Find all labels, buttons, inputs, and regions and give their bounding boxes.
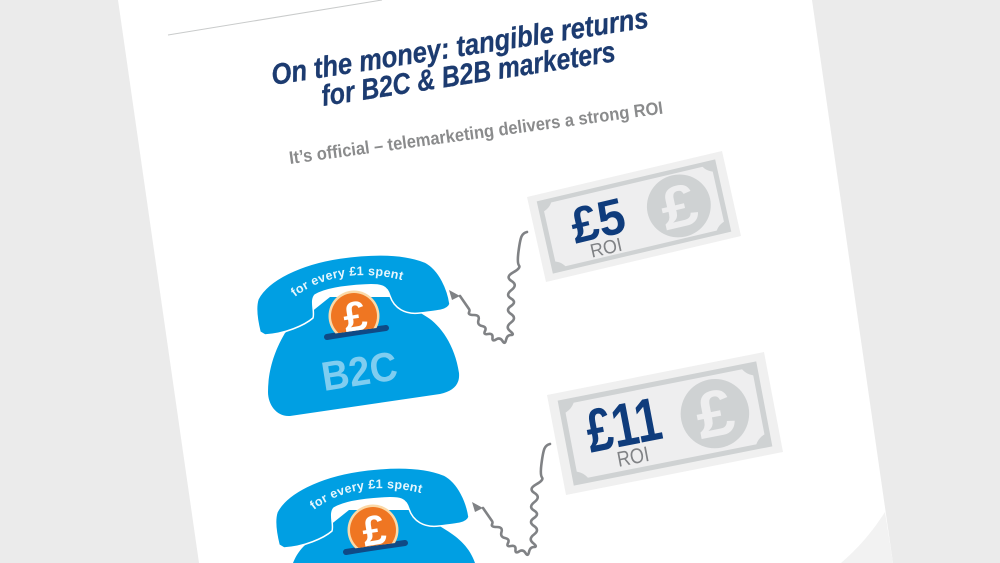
handset [276,468,469,548]
phone cord: B2B [472,444,550,555]
phone body [293,510,475,563]
handset label: for every £1 spent [290,266,404,296]
phone: B2B [276,468,475,563]
coin: £ [340,291,370,341]
subtitle: It’s official – telemarketing delivers a strong ROI [288,98,664,168]
B2C label: B2C [318,343,400,400]
handset [257,255,450,335]
banknote: £5 ROI [527,151,741,282]
paper sheet [118,0,893,563]
banknote: £11 ROI: ROI [615,442,651,472]
banknote: £5 ROI: ROI [588,234,624,262]
banknote: £11 ROI [547,352,783,495]
banknote: £11 ROI: £11 [580,384,667,466]
banknote: £5 ROI: £ [654,170,704,243]
title: for B2C & B2B marketers [319,35,618,113]
coin [348,504,398,548]
page curl [841,512,893,563]
phone cord: B2C [449,232,527,343]
coin slot [346,543,405,552]
coin [328,290,380,334]
coin slot [327,328,386,337]
banknote: £11 ROI: £ [690,375,740,453]
phone body [268,297,459,416]
phone: B2C [257,256,460,416]
coin: £ [359,505,389,555]
banknote: £5 ROI: £5 [566,187,631,255]
handset label: for every £1 spent [310,480,422,510]
